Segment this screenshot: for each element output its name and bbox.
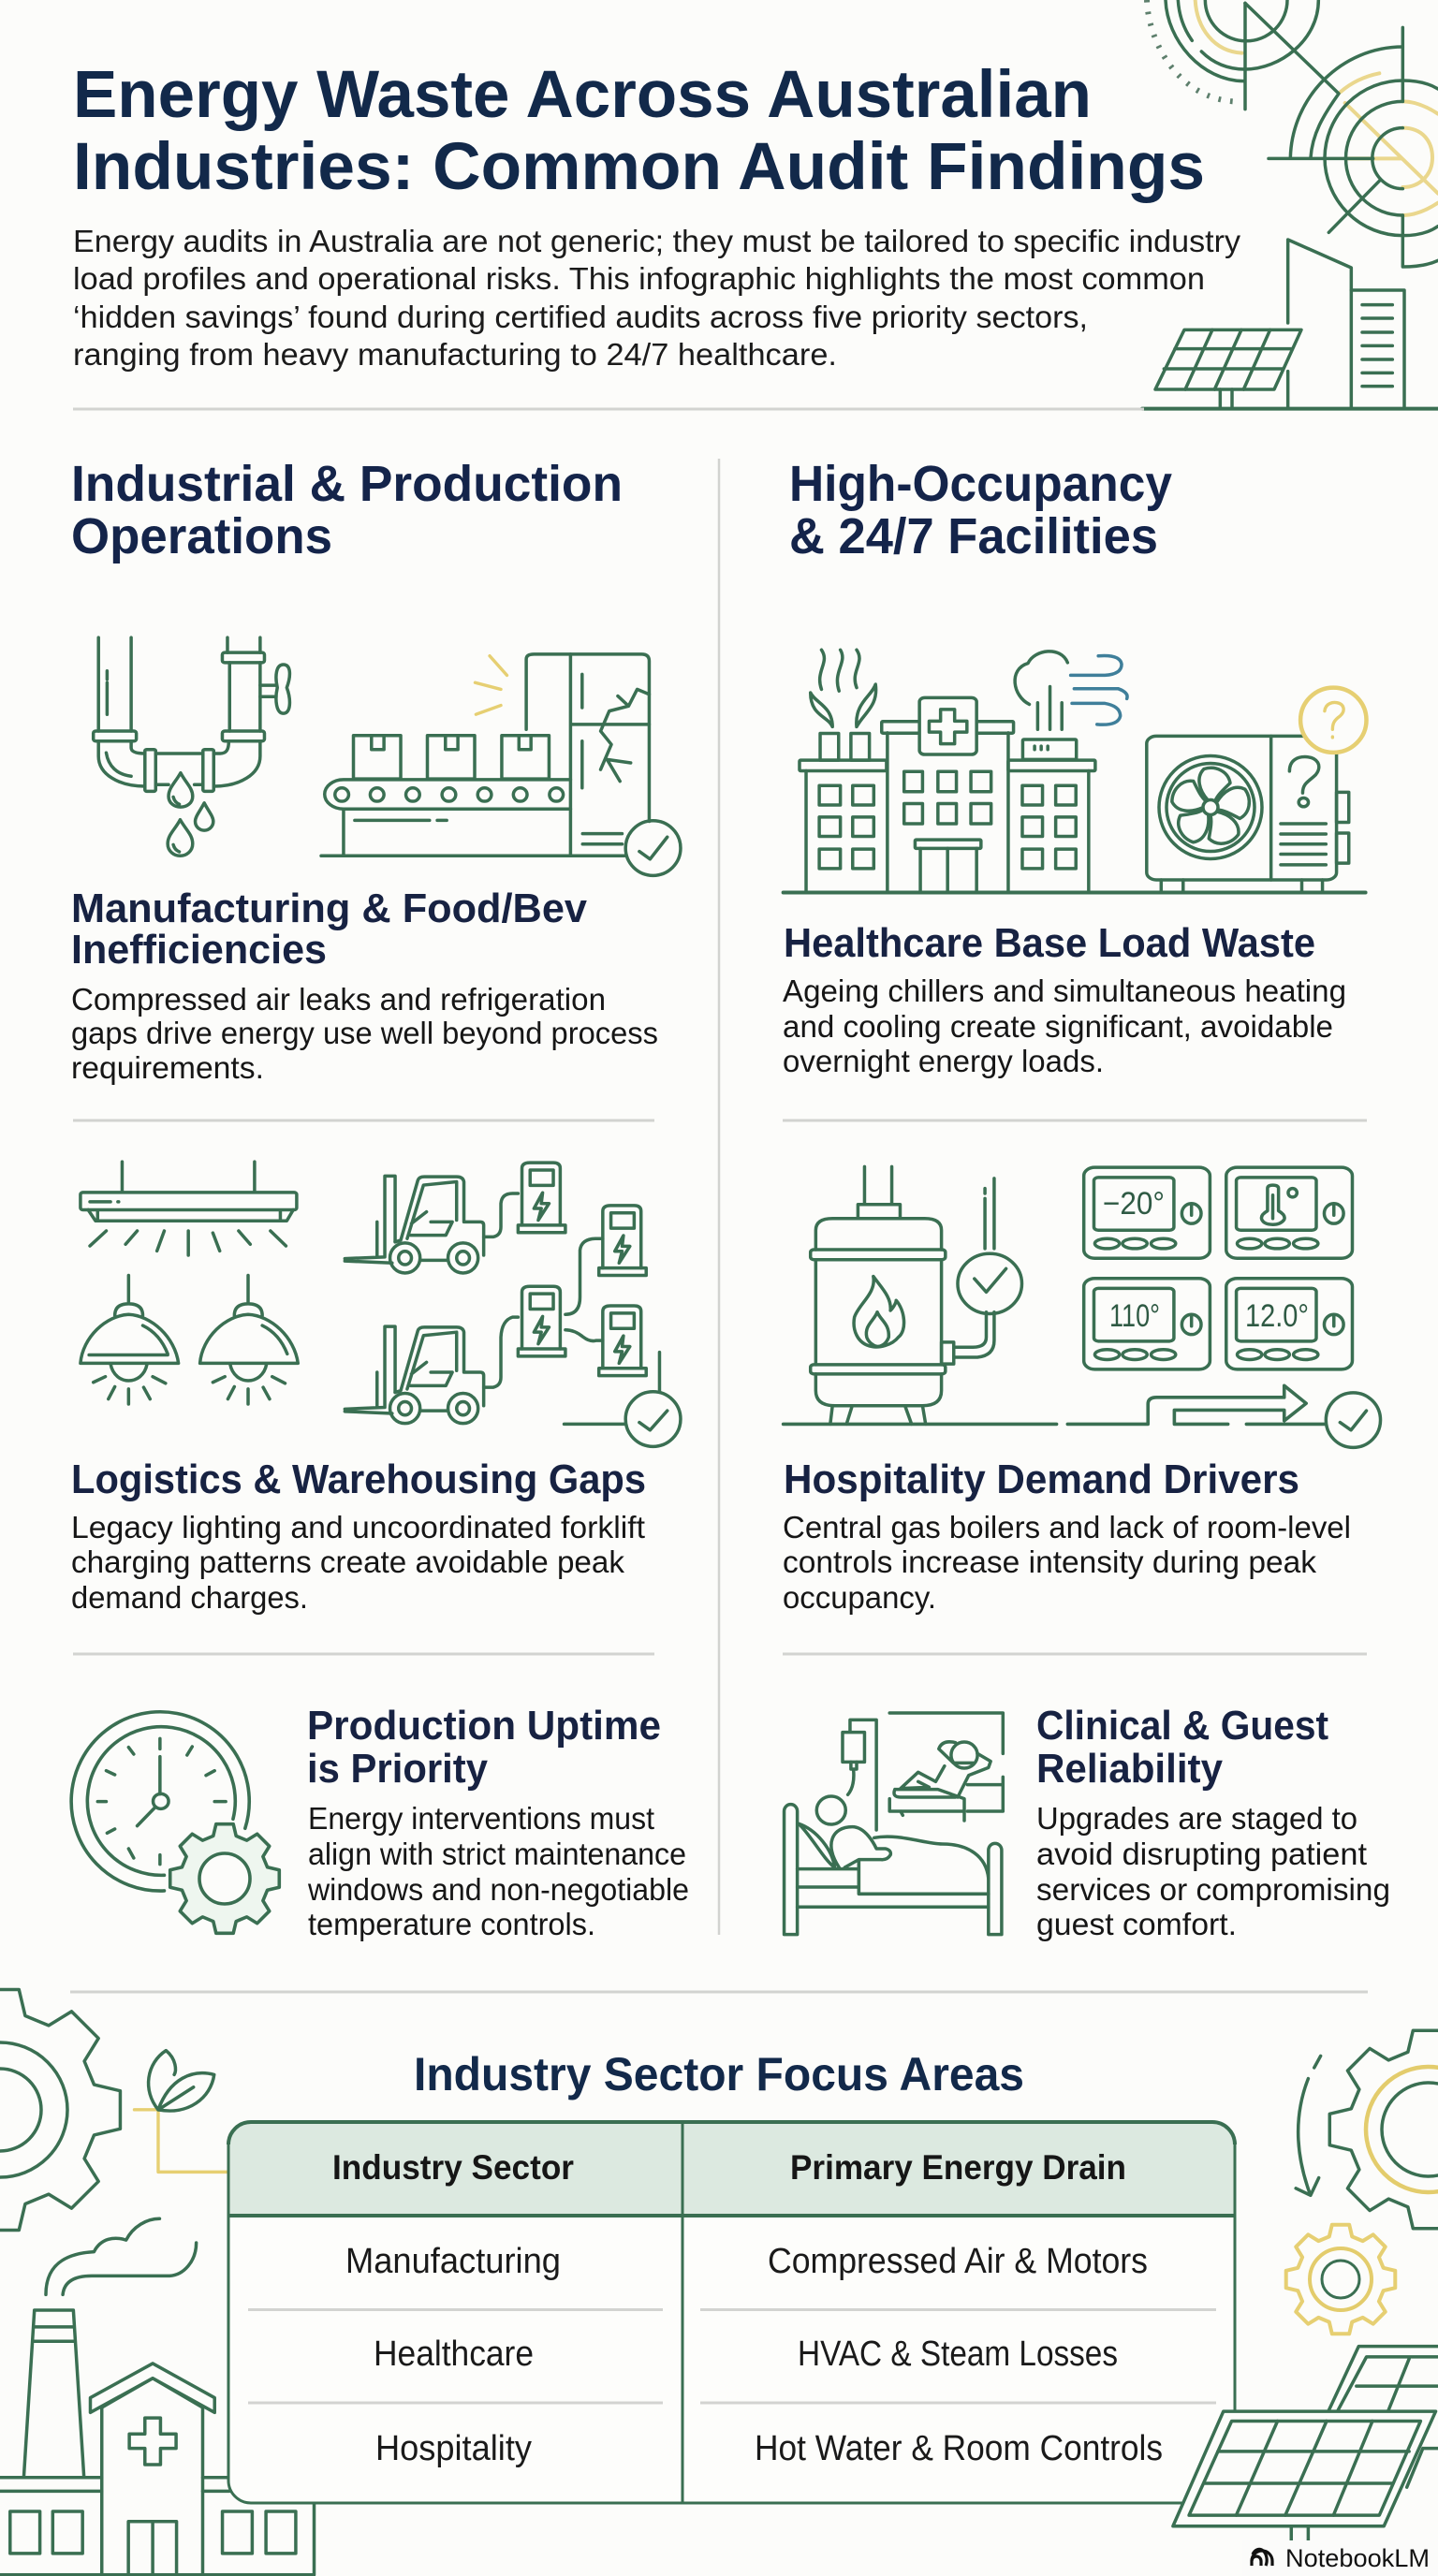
- icon: forklifts and chargers: [345, 1163, 681, 1446]
- charger four: [599, 1306, 646, 1376]
- row: manufacturing: [345, 2242, 1148, 2281]
- body: production uptime: [307, 1801, 689, 1941]
- charger three: [599, 1206, 646, 1275]
- heading: manufacturing: Inefficiencies: [71, 927, 327, 973]
- row: healthcare: [374, 2334, 1118, 2374]
- section heading: industrial: Industrial & Production: [71, 456, 623, 512]
- charger one: [518, 1163, 565, 1233]
- icon: room thermostats: 12.0°: [1245, 1298, 1309, 1334]
- section heading: industrial: Operations: [71, 508, 332, 564]
- icon: leaking pipe: [94, 637, 289, 856]
- body: manufacturing: gaps drive energy use well beyond process: [71, 1016, 658, 1050]
- header: industry sector: Industry Sector: [332, 2148, 574, 2187]
- icon: yellow question badge: [1300, 688, 1367, 753]
- body: clinical and guest: services or compromising: [1036, 1872, 1390, 1907]
- body: healthcare: overnight energy loads.: [783, 1044, 1104, 1078]
- section heading: industrial: [71, 456, 623, 564]
- table heading: Industry Sector Focus Areas: [414, 2048, 1024, 2100]
- icon: NotebookLM mark: [1252, 2549, 1272, 2566]
- forklift one: [345, 1176, 518, 1273]
- heading: clinical and guest: Reliability: [1036, 1746, 1224, 1792]
- body: hospitality: controls increase intensity during peak: [783, 1544, 1317, 1579]
- body: clinical and guest: Upgrades are staged to: [1036, 1801, 1357, 1836]
- icon: hospital with smoke and vent: [784, 650, 1366, 893]
- body: clinical and guest: [1036, 1801, 1390, 1941]
- icon: room thermostats: 110°: [1109, 1298, 1160, 1334]
- row: healthcare: HVAC & Steam Losses: [798, 2334, 1118, 2374]
- charger two: [518, 1286, 565, 1356]
- heading: clinical and guest: [1036, 1703, 1328, 1792]
- heading: production uptime: is Priority: [307, 1746, 488, 1792]
- icon: hospital bed and reclining guest: [785, 1713, 1003, 1935]
- table: industry sector focus areas: [228, 2122, 1235, 2503]
- body: logistics: charging patterns create avoidable peak: [71, 1544, 624, 1579]
- icon: room thermostats: −20°: [1103, 1186, 1165, 1222]
- row: hospitality: [375, 2429, 1163, 2468]
- icon: small yellow gear: [1286, 2225, 1395, 2334]
- body: production uptime: temperature controls.: [308, 1907, 595, 1941]
- icon: rotation arrow: [1296, 2056, 1321, 2195]
- panel: production uptime: [71, 1703, 689, 1941]
- intro paragraph: Energy audits in Australia are not generic; they must be tailored to specific industry: [73, 224, 1241, 258]
- body: logistics: [71, 1510, 645, 1615]
- footer right: gears and solar panels: [1173, 2030, 1438, 2541]
- icon: conveyor and cracked cold store: [321, 654, 681, 875]
- intro paragraph: load profiles and operational risks. This infographic highlights the most common: [73, 261, 1205, 296]
- body: manufacturing: [71, 982, 658, 1085]
- section heading: high occupancy: & 24/7 Facilities: [789, 508, 1158, 564]
- panel: logistics and warehousing: [71, 1162, 681, 1615]
- body: clinical and guest: guest comfort.: [1036, 1907, 1237, 1941]
- intro paragraph: ranging from heavy manufacturing to 24/7 healthcare.: [73, 337, 837, 372]
- icon: large right gear: [1329, 2030, 1438, 2229]
- header decoration: radial arcs, building and solar panel: [1142, 0, 1438, 409]
- row: manufacturing: Manufacturing: [345, 2242, 561, 2281]
- heading: manufacturing: [71, 886, 588, 973]
- body: logistics: demand charges.: [71, 1580, 308, 1615]
- badge: NotebookLM: [1242, 2540, 1438, 2576]
- icon: warehouse lighting: [81, 1162, 298, 1404]
- row: hospitality: Hot Water & Room Controls: [755, 2429, 1163, 2468]
- heading: hospitality: Hospitality Demand Drivers: [784, 1456, 1299, 1502]
- icon: chiller fan: [1159, 756, 1262, 859]
- panel: hospitality: [783, 1166, 1381, 1615]
- title: Energy Waste Across Australian: [73, 58, 1092, 132]
- intro paragraph: [73, 224, 1241, 372]
- body: production uptime: align with strict maintenance: [308, 1837, 686, 1871]
- icon: room thermostats: [1084, 1167, 1352, 1369]
- body: logistics: Legacy lighting and uncoordinated forklift: [71, 1510, 645, 1544]
- body: healthcare: [783, 973, 1346, 1078]
- connector line: [135, 2110, 227, 2172]
- table header band: [230, 2123, 1234, 2216]
- panel: clinical and guest reliability: [785, 1703, 1390, 1941]
- body: healthcare: Ageing chillers and simultaneous heating: [783, 973, 1346, 1008]
- row: hospitality: Hospitality: [375, 2429, 532, 2468]
- icon: factory with smoke: [0, 2218, 315, 2575]
- icon: leaves: [149, 2051, 214, 2111]
- heading: production uptime: Production Uptime: [307, 1703, 661, 1749]
- body: manufacturing: Compressed air leaks and refrigeration: [71, 982, 606, 1017]
- body: production uptime: Energy interventions must: [308, 1801, 654, 1836]
- title: Industries: Common Audit Findings: [73, 130, 1205, 204]
- icon: clock and gear: [71, 1712, 279, 1933]
- panel: manufacturing and food/bev: [71, 637, 681, 1085]
- panel: healthcare: [783, 650, 1367, 1078]
- forklift two: [345, 1317, 518, 1424]
- body: hospitality: Central gas boilers and lack of room-level: [783, 1510, 1351, 1544]
- row: manufacturing: Compressed Air & Motors: [768, 2242, 1148, 2281]
- body: clinical and guest: avoid disrupting patient: [1036, 1837, 1367, 1871]
- table frame: [228, 2122, 1235, 2503]
- heading: manufacturing: Manufacturing & Food/Bev: [71, 886, 588, 931]
- body: healthcare: and cooling create significant, avoidable: [783, 1009, 1333, 1044]
- icon: solar panels: [1173, 2347, 1438, 2541]
- heading: clinical and guest: Clinical & Guest: [1036, 1703, 1328, 1749]
- intro paragraph: ‘hidden savings’ found during certified audits across five priority sectors,: [73, 300, 1088, 334]
- icon: large gear: [0, 1990, 120, 2230]
- title: [73, 58, 1205, 204]
- row: healthcare: Healthcare: [374, 2334, 534, 2374]
- section heading: high occupancy: High-Occupancy: [789, 456, 1172, 512]
- header: primary energy drain: Primary Energy Drain: [790, 2148, 1126, 2187]
- heading: logistics: Logistics & Warehousing Gaps: [71, 1456, 646, 1502]
- badge label: NotebookLM: [1285, 2544, 1430, 2572]
- heading: production uptime: [307, 1703, 661, 1792]
- section heading: high occupancy: [789, 456, 1172, 564]
- icon: gas boiler: [784, 1166, 1381, 1447]
- body: manufacturing: requirements.: [71, 1050, 264, 1085]
- heading: healthcare: Healthcare Base Load Waste: [784, 920, 1315, 966]
- footer left: gear, leaf and factory: [0, 1990, 315, 2575]
- body: production uptime: windows and non-negotiable: [307, 1872, 689, 1907]
- body: hospitality: occupancy.: [783, 1580, 936, 1615]
- body: hospitality: [783, 1510, 1351, 1615]
